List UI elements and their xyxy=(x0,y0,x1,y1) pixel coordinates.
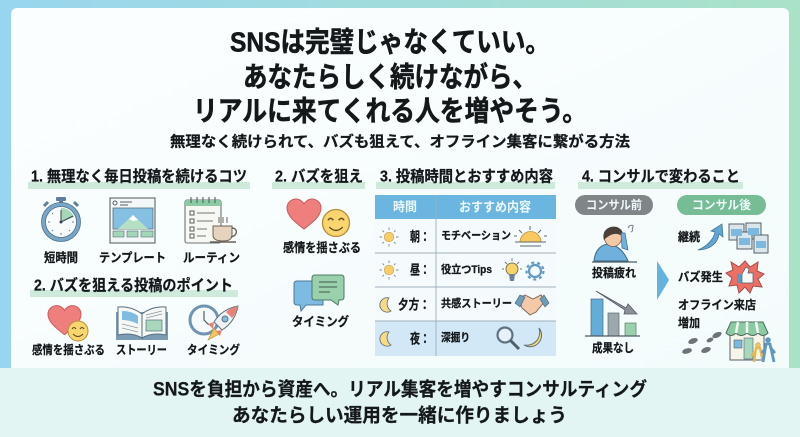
label: routine: ルーティン xyxy=(183,251,240,265)
arrow: before to after xyxy=(657,261,669,300)
label: more offline visits xyxy=(678,297,756,330)
label: template: テンプレート xyxy=(99,251,166,265)
panel: 2. buzz points xyxy=(30,276,240,357)
table header: おすすめ内容 xyxy=(459,200,531,214)
icon: stacked posts xyxy=(729,223,768,253)
table header: 時間 xyxy=(393,199,417,214)
panel: 4. after consulting xyxy=(677,195,775,362)
heading: aim for buzz: 2. バズを狙え xyxy=(275,166,363,186)
label: shake emotions: 感情を揺さぶる xyxy=(283,240,361,255)
label: no results: 成果なし xyxy=(592,340,634,355)
icon: light bulb xyxy=(502,258,522,281)
table row: evening: 夕方： xyxy=(398,296,430,312)
pill: after consulting xyxy=(677,195,766,215)
heading: what changes with consulting: 4. コンサルで変わること xyxy=(582,166,740,186)
table header xyxy=(375,195,556,219)
table row: morning: モチベーション xyxy=(441,229,511,242)
label: shake emotions: 感情を揺さぶる xyxy=(32,342,105,357)
icon: speech bubbles xyxy=(294,275,344,311)
label: timing: タイミング xyxy=(292,314,349,329)
pill: before consulting: コンサル前 xyxy=(586,197,642,212)
heading: section 1: 1. 無理なく毎日投稿を続けるコツ xyxy=(31,166,247,186)
label: posting fatigue: 投稿疲れ xyxy=(592,265,636,280)
panel: 4. before consulting xyxy=(575,166,743,355)
label: short time: 短時間 xyxy=(44,250,78,265)
table row: morning: 朝： xyxy=(410,228,430,244)
footer band xyxy=(0,368,800,437)
label: more offline visits: オフライン来店 xyxy=(678,297,756,312)
label: more offline visits: 増加 xyxy=(678,315,700,330)
icon: gear xyxy=(526,262,544,280)
icon: open book xyxy=(116,307,168,340)
table row: evening: 共感ストーリー xyxy=(441,296,512,310)
table row: noon xyxy=(375,253,556,287)
chart: declining results xyxy=(585,291,640,336)
title xyxy=(193,26,587,126)
panel: 2. aim for buzz xyxy=(272,166,365,329)
table row: evening xyxy=(375,287,556,321)
panel: 3. posting times table xyxy=(375,168,556,356)
footer text xyxy=(153,378,647,426)
panel: 1. daily posting tips xyxy=(28,166,250,265)
icon: stopwatch xyxy=(42,197,80,242)
icon: heart and smile xyxy=(48,306,88,341)
icon: post template xyxy=(110,198,155,243)
icon: thumbs up burst xyxy=(726,261,764,293)
icon: tired person xyxy=(592,225,637,262)
label: timing: タイミング xyxy=(187,342,240,357)
icon: upward arrow xyxy=(698,224,723,250)
icon: clock and rocket xyxy=(190,306,238,340)
icon: heart and smile large xyxy=(287,199,350,236)
label: buzz occurs: バズ発生 xyxy=(678,269,723,284)
icon: footprints xyxy=(681,331,723,355)
icon: crescent moon xyxy=(524,328,542,347)
table row: noon: 役立つTips xyxy=(441,262,492,276)
subtitle: 無理なく続けられて、バズも狙えて、オフライン集客に繋がる方法 xyxy=(170,132,630,150)
heading: buzz posting points: 2. バズを狙える投稿のポイント xyxy=(34,276,233,294)
icon: magnifier xyxy=(498,328,519,349)
table row: night xyxy=(375,321,556,356)
pill: after consulting: コンサル後 xyxy=(692,197,751,212)
footer text: あなたらしい運用を一緒に作りましょう xyxy=(232,404,567,426)
icon: shop with customers xyxy=(726,322,775,362)
label: continuation: 継続 xyxy=(678,229,700,244)
table row: night: 深掘り xyxy=(441,330,470,344)
footer text: SNSを負担から資産へ。リアル集客を増やすコンサルティング xyxy=(153,378,647,400)
pill: before consulting xyxy=(575,195,653,215)
icon: sunrise xyxy=(514,226,547,246)
label: story: ストーリー xyxy=(116,343,167,357)
table row: morning xyxy=(375,219,556,253)
table row: noon: 昼： xyxy=(410,262,430,278)
title: リアルに来てくれる人を増やそう。 xyxy=(193,96,587,126)
heading: posting times and content: 3. 投稿時間とおすすめ内容 xyxy=(380,168,553,186)
title: あなたらしく続けながら、 xyxy=(243,60,537,92)
icon: handshake xyxy=(515,295,549,315)
icon: checklist and coffee cup xyxy=(185,197,236,243)
table row: night: 夜： xyxy=(410,330,430,346)
title: SNSは完璧じゃなくていい。 xyxy=(230,26,550,58)
